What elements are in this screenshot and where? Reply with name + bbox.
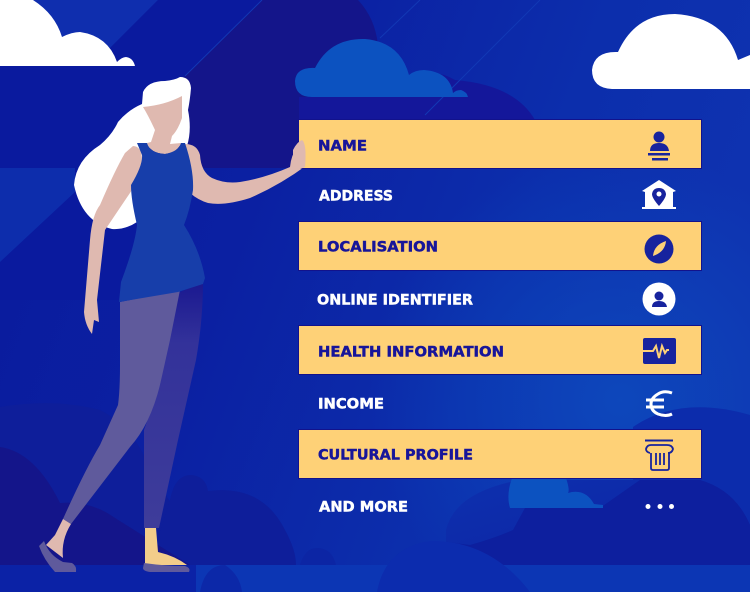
row: and more xyxy=(319,500,674,516)
icon: user badge xyxy=(642,282,676,316)
row: income: INCOME xyxy=(318,396,384,412)
shoe: back xyxy=(143,563,190,572)
row: online identifier xyxy=(317,282,676,316)
row: online identifier: ONLINE IDENTIFIER xyxy=(317,292,473,308)
right arm xyxy=(185,141,308,204)
cloud: blue bottom xyxy=(508,478,603,508)
shoe: front xyxy=(39,541,76,572)
row: health information xyxy=(298,325,702,375)
cloud: blue top centre xyxy=(295,39,468,97)
icon: house pin xyxy=(642,180,676,209)
hills right xyxy=(377,407,750,592)
icon: compass xyxy=(644,234,674,264)
row: income xyxy=(318,392,672,416)
icon: dots xyxy=(646,504,674,509)
row: and more: AND MORE xyxy=(319,500,408,516)
icon: column xyxy=(645,440,673,470)
row: localisation: LOCALISATION xyxy=(318,240,438,256)
left arm xyxy=(84,146,142,334)
row: cultural profile: CULTURAL PROFILE xyxy=(318,448,473,464)
panel: list rows xyxy=(293,119,702,516)
front foot xyxy=(46,519,71,558)
figure: woman xyxy=(39,77,308,572)
row: cultural profile xyxy=(298,429,702,479)
back foot xyxy=(145,528,187,565)
dress xyxy=(119,143,205,302)
row: address: ADDRESS xyxy=(319,188,393,204)
icon: person xyxy=(648,132,670,160)
row: health information: HEALTH INFORMATION xyxy=(318,344,504,360)
icon: euro xyxy=(646,392,672,416)
cloud: white top left xyxy=(0,0,135,66)
hills left xyxy=(0,403,750,592)
row: name: NAME xyxy=(318,138,367,154)
front leg xyxy=(63,290,180,524)
row: address xyxy=(319,180,676,209)
cloud: white top right xyxy=(592,14,750,89)
row: name xyxy=(293,119,702,172)
back leg xyxy=(144,282,203,528)
face and neck xyxy=(143,96,182,154)
hair xyxy=(74,77,191,229)
icon: health monitor xyxy=(643,338,676,364)
row: localisation xyxy=(298,221,702,271)
